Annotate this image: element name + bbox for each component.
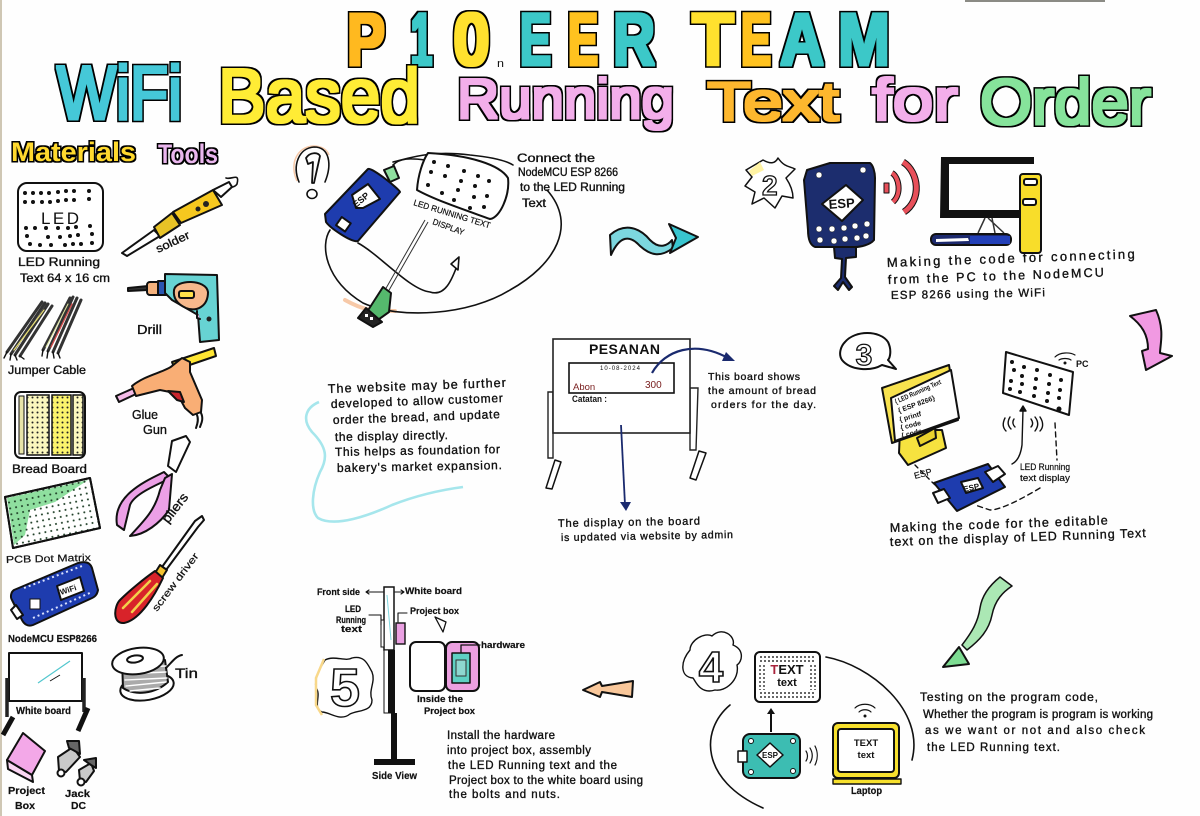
- icon: code monitor: { LED Running Text: [894, 379, 943, 406]
- labels: esp and LED running text display: LED Running: [1020, 462, 1070, 472]
- icon: jumper cables: [4, 297, 81, 360]
- title: PIOnEER TEAM: E: [520, 0, 551, 81]
- label: Side view: Side View: [372, 771, 417, 782]
- title: PIOnEER TEAM: A: [780, 0, 824, 81]
- text: step 2 description: from the PC to the NodeMCU: [888, 265, 1104, 287]
- panel: step 5 install: [316, 586, 643, 801]
- badge: number 2 starburst: [745, 158, 795, 208]
- text: step 2 description: Making the code for connecting: [887, 246, 1135, 270]
- icon: solder: [122, 177, 238, 256]
- panel: step 1 connect: [294, 146, 625, 327]
- label: LED running text display: LED RUNNING TEXT: [412, 197, 492, 230]
- icon: bread board: [15, 392, 85, 458]
- text: step 5 description: Install the hardware: [447, 730, 555, 742]
- text: display note: is updated via website by admin: [561, 529, 733, 544]
- icon: LED display with text: text: [777, 677, 797, 689]
- icon: NodeMCU ESP8266: [11, 562, 98, 626]
- icon: side view stand: [374, 587, 415, 765]
- badge: number 3 speech bubble: 3: [856, 339, 872, 372]
- text: board note: This board shows: [708, 371, 800, 383]
- text: step 4 description: Whether the program is program is working: [923, 709, 1153, 721]
- subtitle: WiFi Based Running Text for Order: Running: [457, 67, 674, 130]
- text: display note: [558, 516, 733, 544]
- subtitle: WiFi Based Running Text for Order: Text: [707, 72, 839, 132]
- label: Jack DC: Jack: [65, 789, 90, 800]
- subtitle: WiFi Based Running Text for Order: Order: [980, 66, 1151, 138]
- icon: NodeMCU blue board: [325, 166, 400, 241]
- subtitle: WiFi Based Running Text for Order: [57, 51, 1151, 139]
- labels: esp and LED running text display: [913, 462, 1071, 483]
- icon: PC monitor and tower: [931, 157, 1041, 253]
- icon: LED running text panel: LED: [41, 209, 79, 228]
- icon: LED display with text: [755, 652, 820, 702]
- arrow: step 1 to step 2: [610, 224, 698, 255]
- text: future development: The website may be further: [328, 376, 506, 396]
- data table: order row: [569, 363, 674, 393]
- icon: code monitor: [882, 365, 959, 465]
- icon: white board: [546, 339, 706, 489]
- label: Glue Gun: Gun: [143, 422, 167, 437]
- text: board note: the amount of bread: [708, 385, 816, 397]
- label: solder: solder: [154, 230, 192, 256]
- heading: Materials and Tools: Materials: [11, 137, 136, 167]
- text: step 4 description: [920, 690, 1153, 754]
- badge: number 4 cloud: [683, 632, 741, 692]
- icon: PCB dot matrix: [5, 478, 100, 548]
- text: future development: developed to allow customer: [331, 391, 503, 411]
- text: step 2 description: ESP 8266 using the WiFi: [891, 287, 1045, 302]
- icon: ESP board: [933, 464, 1005, 511]
- label: LED running text display: DISPLAY: [431, 216, 466, 237]
- label: NodeMCU ESP8266: NodeMCU ESP8266: [8, 634, 97, 645]
- icon: laptop: [833, 704, 901, 784]
- title: PIOnEER TEAM: 1: [411, 0, 432, 81]
- badge: number 5 blob: [316, 657, 373, 718]
- icon: LED running text panel: [417, 153, 508, 219]
- label: Catatan: Catatan :: [572, 394, 607, 404]
- badge: number 3 speech bubble: [840, 333, 896, 372]
- data table: order row: 300: [645, 380, 662, 391]
- icon: white board: [3, 653, 88, 735]
- label: inside the project box: [417, 694, 475, 716]
- text: step 3 description: text on the display of LED Running Text: [890, 526, 1146, 549]
- text: step 5 description: the bolts and nuts.: [449, 789, 560, 801]
- label: screw driver: screw driver: [151, 551, 202, 614]
- icon: LED running text panel: [18, 183, 103, 251]
- icon: USB plug and cable: [358, 220, 428, 327]
- title: PIOnEER TEAM: M: [838, 0, 890, 81]
- heading: Materials and Tools: [11, 137, 218, 169]
- icon: ESP board: ESP: [963, 482, 981, 494]
- label: Bread Board: Bread Board: [12, 464, 87, 476]
- title: PIOnEER TEAM: [347, 0, 890, 81]
- text: board note: [708, 371, 816, 411]
- icon: laptop: text: [858, 750, 875, 761]
- label: Laptop: Laptop: [851, 786, 882, 797]
- text: connect instruction: NodeMCU ESP 8266: [518, 167, 618, 179]
- labels: stand parts: White board: [405, 586, 462, 597]
- subtitle: WiFi Based Running Text for Order: Based: [218, 54, 420, 139]
- icon: teal ESP board: [738, 734, 817, 778]
- label: Jack DC: [65, 789, 90, 812]
- icon: code monitor: { code: [901, 428, 923, 440]
- arrow: to display note: [620, 425, 631, 511]
- icon: NodeMCU ESP8266: WiFi: [59, 583, 78, 597]
- heading: Materials and Tools: Tools: [158, 139, 218, 169]
- icon: ESP module: [804, 163, 875, 290]
- text: step 5 description: into project box, assembly: [447, 745, 591, 757]
- label: pliers: pliers: [159, 489, 192, 526]
- data table: order row: 10-08-2024: [600, 366, 641, 372]
- icon: laptop: TEXT: [854, 738, 878, 749]
- label: Drill: Drill: [137, 322, 162, 337]
- text: step 2 description: [887, 246, 1135, 302]
- icon: drill: [128, 274, 219, 342]
- subtitle: WiFi Based Running Text for Order: for: [872, 68, 958, 133]
- label: LED Running Text: [18, 257, 110, 285]
- icon: code monitor: { printf: [899, 411, 923, 424]
- heading: PESANAN: PESANAN: [589, 341, 660, 357]
- label: LED Running Text: LED Running: [18, 257, 100, 269]
- icon: teal ESP board: ESP: [762, 751, 779, 760]
- data table: order row: Abon: [573, 382, 595, 393]
- label: Jack DC: DC: [71, 801, 86, 812]
- icon: ESP module: ESP: [828, 195, 856, 212]
- icon: signal arrow: [915, 406, 1057, 510]
- label: PCB Dot Matrix: PCB Dot Matrix: [6, 553, 91, 566]
- badge: number 2 starburst: 2: [762, 170, 778, 201]
- label: White board: White board: [16, 706, 71, 717]
- panel: step 3 editable text: [840, 333, 1146, 549]
- label: Glue Gun: [132, 407, 167, 437]
- labels: stand parts: Running: [336, 615, 366, 625]
- icon: pliers: [117, 436, 190, 536]
- text: future development: [328, 376, 506, 475]
- badge: number 5 blob: 5: [330, 658, 360, 718]
- icon: LED display with text: TEXT: [770, 662, 804, 677]
- badge: number 1: [294, 146, 329, 198]
- label: inside the project box: Inside the: [417, 694, 463, 704]
- text: future development: the display directly.: [335, 428, 448, 444]
- arrow: step 2 to step 3: [1130, 310, 1172, 370]
- icon: LED panel and WiFi: PC: [1076, 359, 1089, 369]
- text: connect instruction: Text: [522, 198, 547, 210]
- labels: stand parts: [317, 586, 462, 634]
- icon: code monitor: { code: [900, 420, 922, 432]
- text: step 5 description: the LED Running text and the: [448, 760, 617, 772]
- icon: WiFi signal waves: [884, 162, 916, 212]
- subtitle: WiFi Based Running Text for Order: WiFi: [57, 51, 182, 136]
- text: connect instruction: [517, 153, 625, 210]
- panel: step 2 WiFi code: [745, 157, 1135, 302]
- label: LED Running Text: Text 64 x 16 cm: [20, 273, 110, 285]
- text: step 5 description: [447, 730, 643, 801]
- icon: screw driver: [115, 516, 204, 623]
- labels: stand parts: Project box: [410, 606, 460, 617]
- text: step 5 description: Project box to the white board using: [449, 775, 643, 787]
- badge: number 4 cloud: 4: [699, 643, 724, 692]
- title: PIOnEER TEAM: E: [568, 0, 598, 81]
- labels: stand parts: LED: [345, 604, 361, 614]
- text: board note: orders for the day.: [711, 399, 816, 411]
- connection arcs: [711, 657, 914, 808]
- title: PIOnEER TEAM: 0: [453, 0, 490, 81]
- arrow: board to display: [767, 708, 775, 732]
- text: connect instruction: Connect the: [517, 153, 595, 165]
- arrow: step 4 to step 5: [583, 681, 633, 697]
- label: Glue Gun: Glue: [132, 407, 158, 422]
- labels: esp and LED running text display: ESP: [913, 467, 933, 481]
- panel: step 4 testing: [683, 632, 1153, 808]
- label: Jumper Cable: Jumper Cable: [8, 365, 86, 377]
- icon: inside of project box: [410, 617, 480, 691]
- text: future development: order the bread, and update: [333, 407, 500, 427]
- icon: jack DC: [58, 741, 96, 786]
- arrow: step 3 to step 4: [943, 577, 1012, 667]
- label: Project Box: Box: [15, 801, 35, 812]
- text: step 3 description: Making the code for the editable: [890, 513, 1108, 535]
- panel: order board: [546, 339, 816, 544]
- text: future development: This helps as foundation for: [335, 442, 500, 459]
- title: PIOnEER TEAM: E: [741, 0, 771, 81]
- labels: stand parts: Front side: [317, 587, 360, 597]
- icon: code monitor: { ESP 8266}: [897, 395, 936, 415]
- icon: glue gun: [116, 348, 216, 428]
- text: step 4 description: the LED Running text.: [927, 742, 1060, 754]
- panel: materials and tools list: [3, 177, 238, 812]
- labels: stand parts: text: [341, 624, 362, 634]
- decoration: teal ribbon curve: [306, 402, 463, 522]
- title: PIOnEER TEAM: T: [692, 0, 734, 81]
- text: step 4 description: as we want or not and also check: [925, 725, 1145, 737]
- title: PIOnEER TEAM: P: [347, 0, 385, 81]
- text: future development: bakery's market expansion.: [337, 458, 502, 475]
- label: Project Box: Project: [8, 786, 46, 797]
- labels: esp and LED running text display: text display: [1020, 473, 1071, 483]
- label: inside the project box: Project box: [424, 706, 475, 716]
- text: step 4 description: Testing on the program code,: [920, 690, 1098, 704]
- title: PIOnEER TEAM: n: [497, 58, 504, 70]
- text: step 3 description: [890, 513, 1146, 549]
- title: PIOnEER TEAM: R: [613, 0, 655, 81]
- text: connect instruction: to the LED Running: [520, 182, 625, 194]
- connection loop lines: [326, 153, 561, 313]
- arrow: to board note: [652, 349, 735, 373]
- label: Tin: Tin: [175, 665, 198, 681]
- icon: NodeMCU blue board: ESP: [351, 190, 371, 210]
- icon: solder tin: [110, 645, 182, 704]
- panel: future development note: [306, 376, 506, 522]
- icon: project box: [7, 733, 45, 782]
- label: Project Box: [8, 786, 46, 812]
- text: display note: The display on the board: [558, 516, 700, 530]
- icon: LED panel and WiFi: [1003, 352, 1089, 415]
- label: hardware: hardware: [481, 640, 525, 651]
